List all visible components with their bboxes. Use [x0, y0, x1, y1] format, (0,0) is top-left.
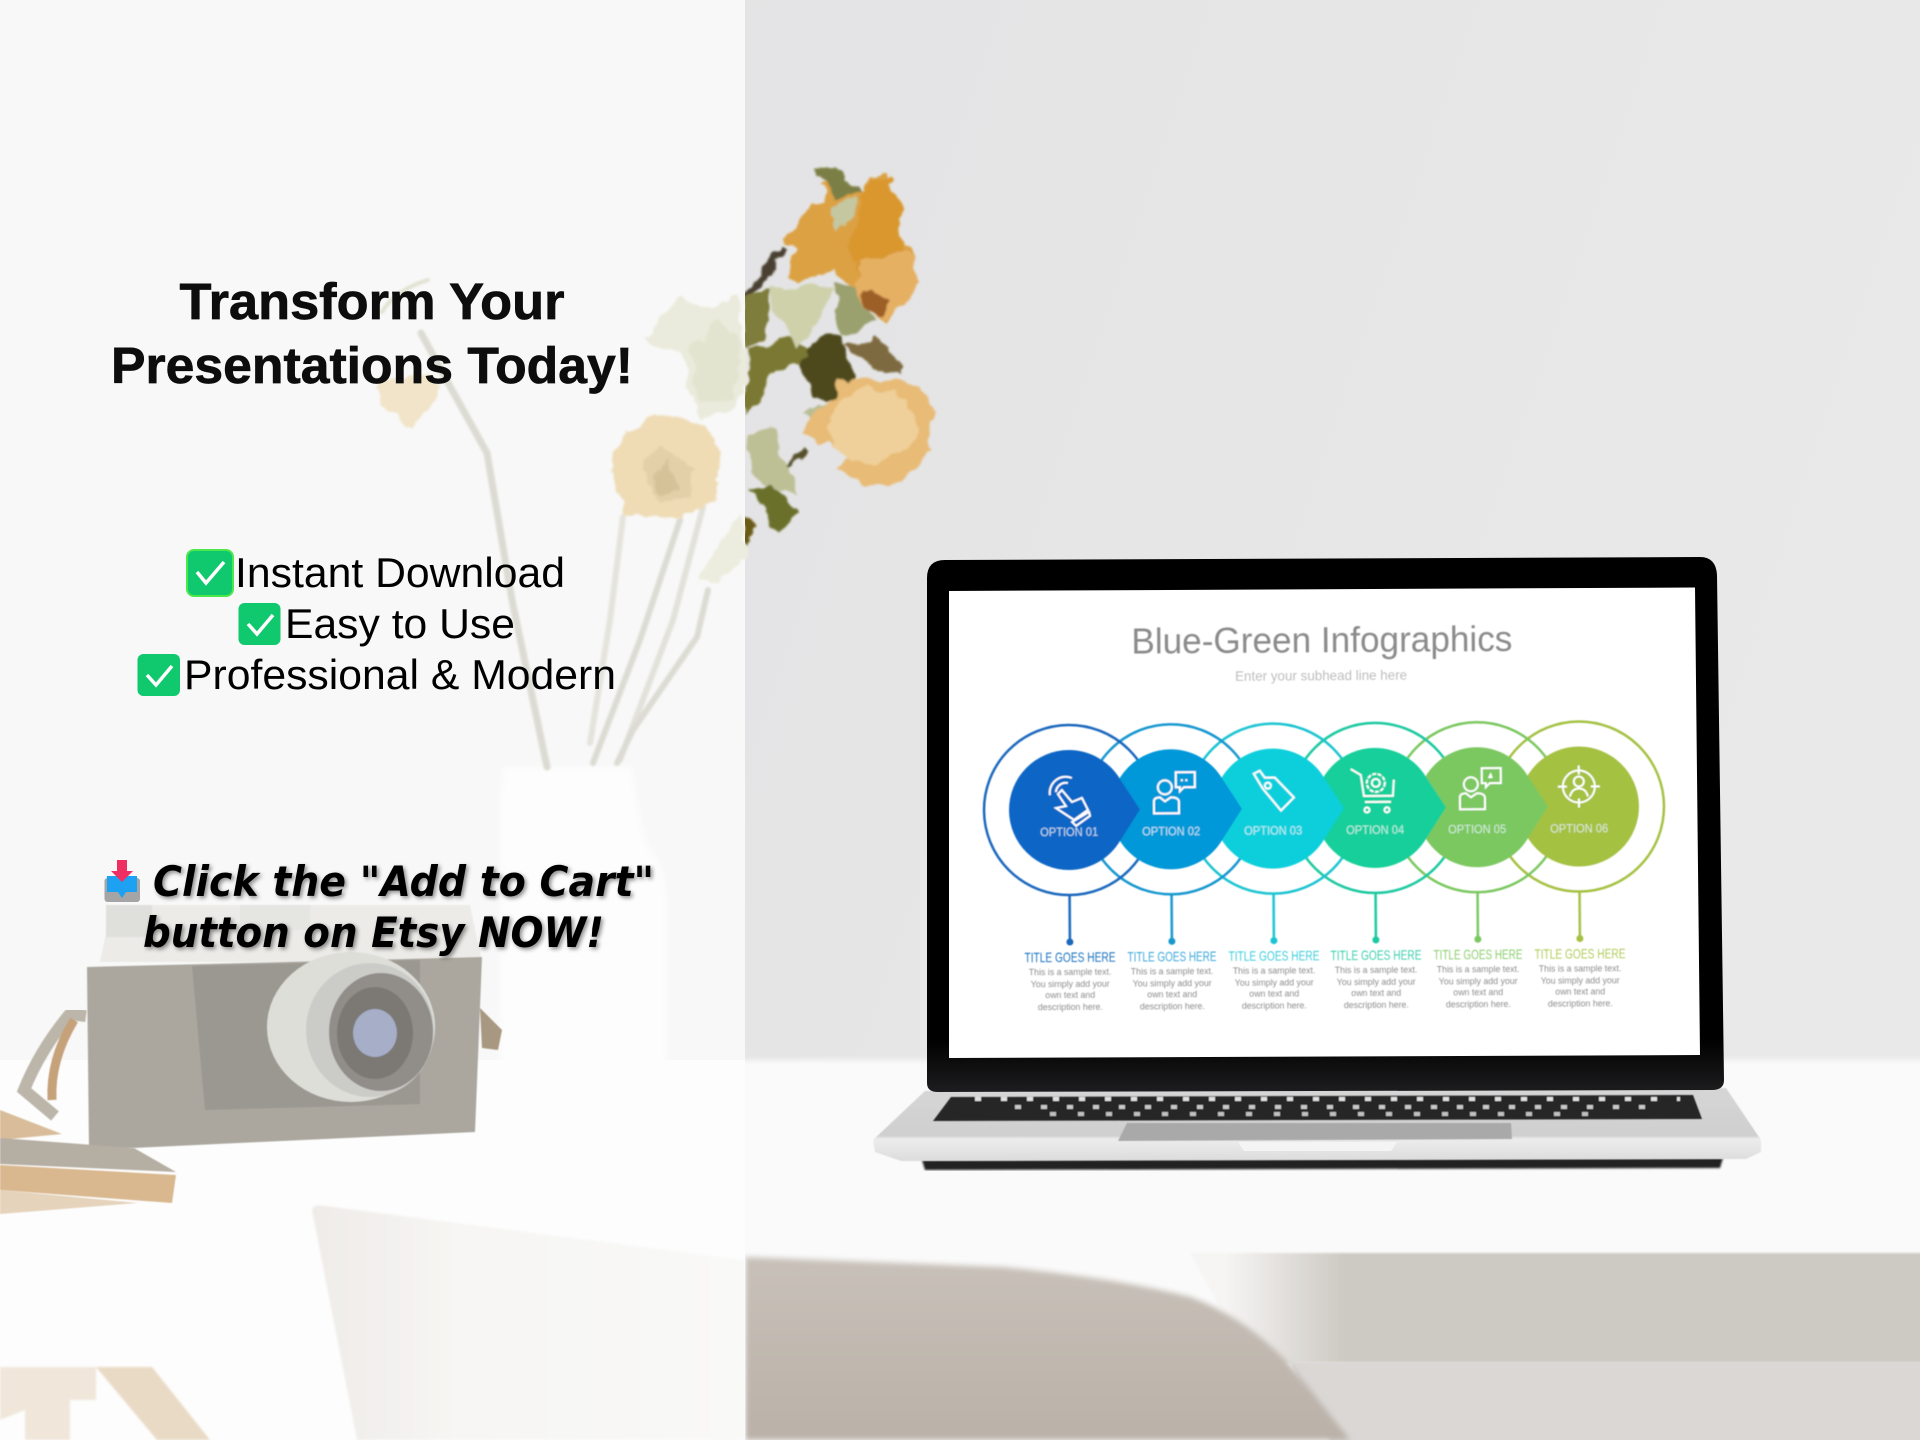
column text 02: description here.: [1140, 1001, 1205, 1012]
option 06 disc: [1519, 746, 1639, 867]
icon: check Easy to Use: [238, 603, 280, 645]
panel: faded left text panel: [0, 0, 745, 1440]
option labels: OPTION 03: [1244, 823, 1302, 838]
column text 02: [1127, 948, 1217, 1012]
icon: check Professional and Modern: [138, 654, 180, 696]
column text 04: You simply add your: [1337, 977, 1416, 987]
option 04 disc: [1315, 747, 1446, 868]
heading: Transform Your Presentations Today: Presentations Today!: [111, 337, 633, 394]
option 05 disc: [1417, 747, 1548, 868]
column text 04: own text and: [1351, 988, 1401, 998]
option labels: OPTION 06: [1550, 821, 1608, 836]
washed-out camera: [87, 905, 502, 1150]
column text 03: TITLE GOES HERE: [1228, 947, 1320, 964]
option labels: [1040, 821, 1608, 839]
column text 03: [1228, 947, 1320, 1011]
column text 02: You simply add your: [1133, 978, 1212, 989]
column text 04: [1330, 947, 1422, 1010]
column text 06: description here.: [1548, 998, 1613, 1009]
column text 01: This is a sample text.: [1029, 967, 1111, 977]
column text 02: own text and: [1147, 989, 1197, 999]
column text 01: TITLE GOES HERE: [1024, 949, 1116, 965]
icon: inbox download: [104, 860, 140, 902]
column text 02: TITLE GOES HERE: [1127, 948, 1217, 965]
column text 03: You simply add your: [1235, 977, 1314, 988]
column text 06: You simply add your: [1541, 975, 1620, 986]
option 02 disc: [1111, 749, 1242, 870]
trackpad: [1118, 1123, 1512, 1141]
column text 05: You simply add your: [1439, 976, 1518, 986]
outer rings: [983, 721, 1665, 896]
column text 03: This is a sample text.: [1233, 965, 1315, 976]
icon: target person: [1558, 765, 1600, 808]
lid notch: [1238, 1142, 1397, 1151]
option labels: OPTION 01: [1040, 825, 1098, 839]
call to action: Click the "Add to Cart": [153, 857, 654, 906]
keyboard: [933, 1095, 1702, 1121]
option 03 disc: [1213, 748, 1344, 869]
column text 05: This is a sample text.: [1437, 964, 1519, 975]
laptop shadow on desk: [922, 1158, 1723, 1170]
column text 05: [1433, 946, 1523, 1010]
laptop screen: [949, 588, 1700, 1058]
text: Professional and Modern: Professional & Modern: [184, 651, 616, 698]
washed-out chair: [312, 1205, 745, 1440]
connector stems: [1066, 892, 1583, 946]
slide subtitle: Enter your subhead line here: [1235, 667, 1407, 684]
column text 03: description here.: [1242, 1000, 1307, 1011]
text: Easy to Use: Easy to Use: [285, 600, 515, 647]
icon: person with chat bubble: [1154, 772, 1195, 813]
laptop base: [873, 1088, 1761, 1161]
column text 01: own text and: [1045, 990, 1095, 1000]
washed-out roses and leaves: [378, 295, 745, 580]
column text 01: You simply add your: [1031, 979, 1110, 989]
column text 06: This is a sample text.: [1539, 963, 1621, 974]
column text 06: [1534, 945, 1626, 1009]
icon: price tag: [1254, 770, 1294, 811]
heading: Transform Your Presentations Today: Transform Your: [180, 273, 565, 330]
option labels: OPTION 04: [1346, 823, 1404, 837]
column text 06: TITLE GOES HERE: [1534, 945, 1626, 962]
washed-out desk: [0, 1060, 745, 1440]
icon: check Instant Download: [187, 550, 233, 596]
column text 05: TITLE GOES HERE: [1433, 946, 1523, 963]
column text 04: This is a sample text.: [1335, 965, 1417, 975]
call to action: button on Etsy NOW!: [143, 908, 604, 957]
washed-out stems: [382, 280, 708, 767]
screen bezel: [927, 557, 1724, 1092]
column text 04: description here.: [1344, 1000, 1409, 1010]
slide title: Blue-Green Infographics: [1131, 618, 1512, 662]
column text 02: This is a sample text.: [1131, 966, 1213, 977]
column text 06: own text and: [1555, 986, 1605, 997]
text: Instant Download: Instant Download: [235, 549, 565, 596]
call to action: [143, 857, 654, 957]
laptop mockup: [873, 557, 1761, 1170]
option labels: OPTION 05: [1448, 822, 1506, 836]
washed-out table legs: [0, 1367, 210, 1440]
icon: person with star bubble: [1460, 768, 1501, 809]
option labels: OPTION 02: [1142, 824, 1200, 839]
column text 05: own text and: [1453, 987, 1503, 997]
heading: Transform Your Presentations Today: [111, 273, 633, 394]
infographic slide on the screen: [983, 617, 1665, 1013]
icon: touch hand: [1050, 777, 1090, 826]
washed-out camera strap: [0, 1014, 176, 1214]
column text 01: [1024, 949, 1116, 1012]
column text 01: description here.: [1038, 1002, 1103, 1012]
column text 05: description here.: [1446, 999, 1511, 1009]
option 01 disc: [1009, 750, 1140, 870]
washed-out vase: [500, 767, 667, 1115]
dried roses and leaves on the wall: [745, 168, 932, 547]
column text 04: TITLE GOES HERE: [1330, 947, 1422, 963]
column text 03: own text and: [1249, 988, 1299, 999]
icon: shopping cart with gear: [1351, 769, 1394, 813]
